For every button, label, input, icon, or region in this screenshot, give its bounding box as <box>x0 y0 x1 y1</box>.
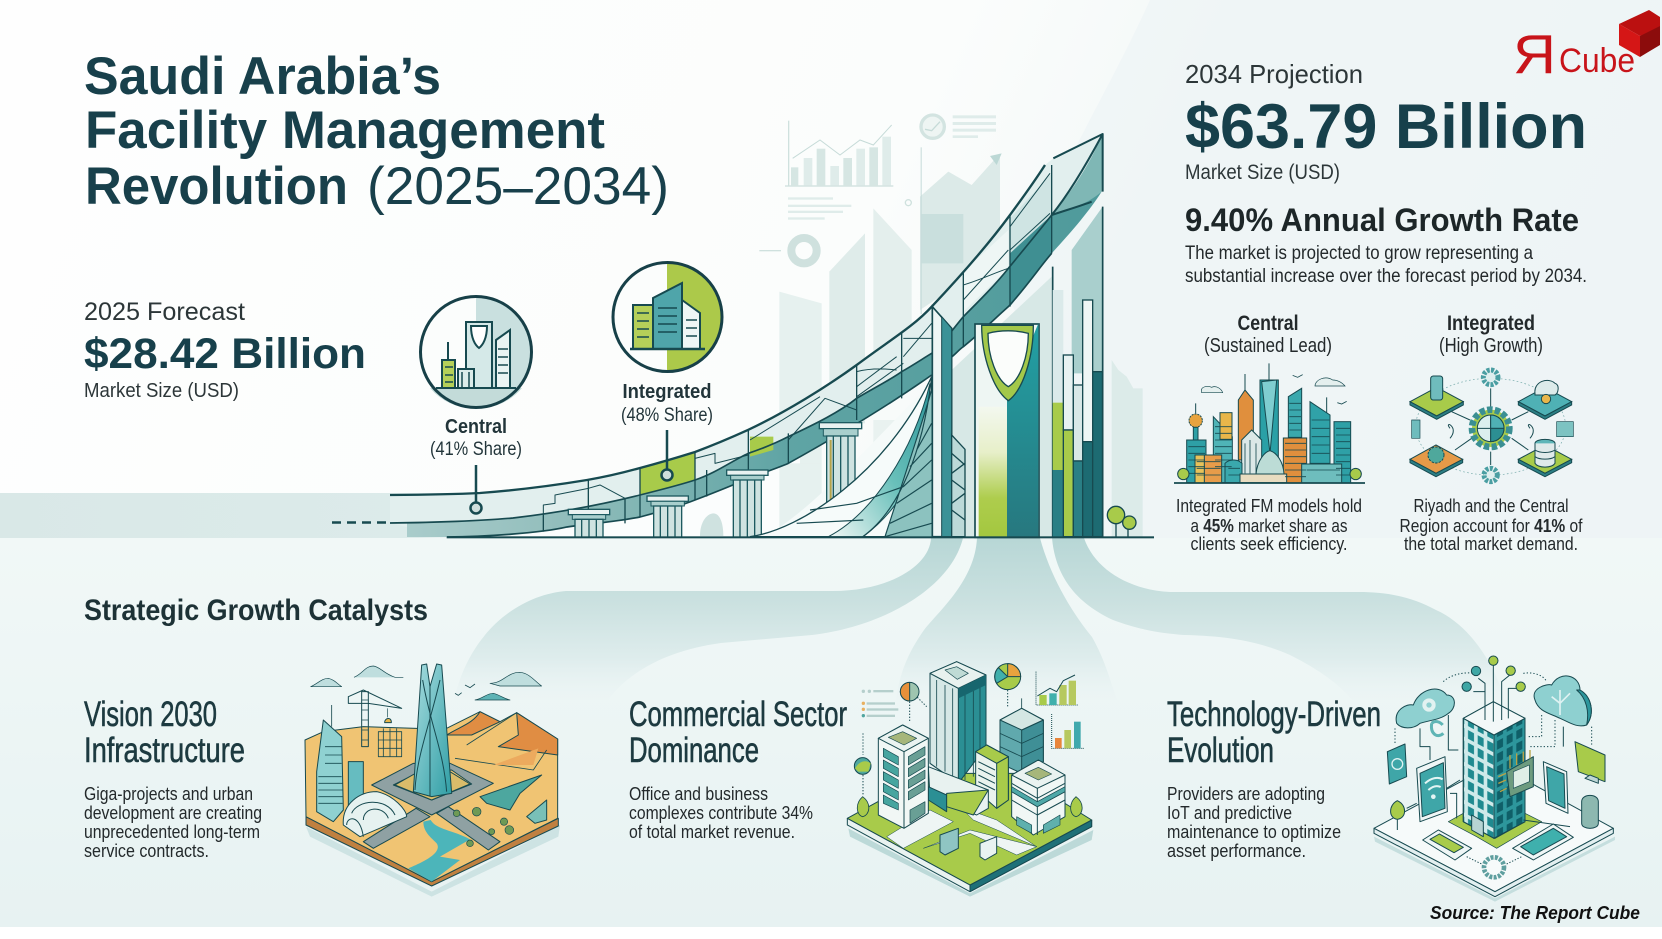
mini charts <box>1036 672 1078 705</box>
building <box>1463 702 1525 838</box>
icon: isometric office district <box>847 662 1093 897</box>
marker: Central share: Central <box>445 416 507 438</box>
shrubs <box>453 807 514 847</box>
title: Saudi Arabia’s <box>84 47 441 106</box>
logo: RCube: Cube <box>1559 42 1635 80</box>
pie badges <box>995 664 1021 690</box>
main skyline growth curve illustration <box>390 113 1154 538</box>
2034 projection stat: Market Size (USD) <box>1185 161 1340 184</box>
marker: Integrated share: Integrated <box>622 381 712 403</box>
left tower <box>878 725 928 828</box>
2025 forecast stat: 2025 Forecast <box>84 298 245 326</box>
chip <box>1507 757 1533 797</box>
2025 forecast stat: $28.42 Billion <box>84 330 366 378</box>
title: Revolution <box>85 157 348 216</box>
logo: RCube <box>1513 10 1660 85</box>
panel: Central sustained lead: clients seek efficiency. <box>1190 533 1348 554</box>
panel: Integrated high growth <box>1400 312 1583 554</box>
catalyst: Commercial Sector Dominance <box>629 662 1093 897</box>
panel: Central sustained lead: (Sustained Lead) <box>1204 334 1332 357</box>
catalyst: Technology-Driven Evolution: Technology-Driven <box>1167 695 1381 734</box>
catalyst: Vision 2030 Infrastructure: development are creating <box>84 803 262 823</box>
heading: Strategic Growth Catalysts: Strategic Growth Catalysts <box>84 594 428 627</box>
growth rate block: The market is projected to grow representing a <box>1185 242 1533 264</box>
catalyst: Technology-Driven Evolution: maintenance to optimize <box>1167 822 1341 842</box>
catalyst: Commercial Sector Dominance: complexes contribute 34% <box>629 803 813 823</box>
curved band fills <box>390 134 1103 537</box>
small trees <box>1107 506 1136 537</box>
pillars <box>568 470 768 653</box>
panel: Central sustained lead: Central <box>1238 312 1298 335</box>
panel: Central sustained lead: Integrated FM models hold <box>1176 495 1362 516</box>
tablets and devices <box>1417 757 1447 822</box>
catalyst: Technology-Driven Evolution: Providers are adopting <box>1167 784 1325 804</box>
green block <box>976 745 1008 808</box>
2034 projection stat: $63.79 Billion <box>1185 92 1587 162</box>
title: (2025–2034) <box>367 157 669 216</box>
connector <box>475 465 477 503</box>
marker: Integrated share <box>613 262 722 480</box>
wing net <box>750 377 932 537</box>
antenna lines <box>1473 665 1520 722</box>
plaza pieces <box>940 828 958 855</box>
Kingdom Centre tower <box>975 323 1039 537</box>
2025 forecast stat <box>84 298 366 402</box>
connector block <box>928 767 988 815</box>
main tower <box>413 664 452 797</box>
logo: RCube: Я <box>1513 23 1556 85</box>
clouds <box>311 678 342 687</box>
panel: Integrated high growth: Integrated <box>1447 312 1535 335</box>
catalyst: Commercial Sector Dominance: Office and business <box>629 784 768 804</box>
connections <box>1395 673 1592 747</box>
ground line <box>447 536 1154 538</box>
panel: Central sustained lead <box>1174 312 1365 554</box>
2034 projection stat <box>1185 59 1587 184</box>
catalyst: Vision 2030 Infrastructure <box>84 664 560 897</box>
catalyst: Vision 2030 Infrastructure: Giga-projects and urban <box>84 784 253 804</box>
catalyst: Technology-Driven Evolution: asset performance. <box>1167 841 1306 861</box>
panel: Integrated high growth: Region account for 41% of <box>1400 515 1583 536</box>
catalyst: Vision 2030 Infrastructure: Infrastructure <box>84 731 245 770</box>
marker: Central share: (41% Share) <box>430 438 522 460</box>
panel: Integrated high growth: the total market demand. <box>1404 533 1578 554</box>
back right tower <box>1000 708 1043 773</box>
catalyst: Commercial Sector Dominance: Dominance <box>629 731 759 770</box>
catalyst: Technology-Driven Evolution: Evolution <box>1167 731 1274 770</box>
right bars <box>1053 207 1103 537</box>
source note: Source: The Report Cube <box>1430 902 1640 923</box>
growth rate block: 9.40% Annual Growth Rate <box>1185 202 1579 238</box>
flow ribbons from the skyline to the catalysts <box>454 538 1505 700</box>
central column <box>932 307 952 537</box>
trees <box>857 797 1082 817</box>
icon: red cube <box>1619 10 1660 57</box>
green pane at the Integrated marker <box>640 452 695 495</box>
catalyst: Commercial Sector Dominance: Commercial Sector <box>629 695 847 734</box>
panel: Integrated high growth: (High Growth) <box>1439 334 1543 357</box>
2034 projection stat: 2034 Projection <box>1185 59 1363 89</box>
catalyst: Technology-Driven Evolution: IoT and predictive <box>1167 803 1292 823</box>
dashed lead-in <box>332 521 388 524</box>
stadium <box>480 775 542 810</box>
pale building behind tower <box>952 277 1052 537</box>
front right building <box>1012 760 1065 835</box>
dome <box>343 792 407 837</box>
panel: Central sustained lead: a 45% market share as <box>1190 515 1348 536</box>
growth rate block <box>1185 202 1587 287</box>
icon: colourful city skyline <box>1174 363 1365 483</box>
faint list <box>862 690 898 717</box>
icon: isometric desert city <box>305 664 560 897</box>
icon: smart building with cloud and devices <box>1374 656 1615 902</box>
tall tower <box>930 662 986 783</box>
catalyst: Commercial Sector Dominance: of total market revenue. <box>629 822 795 842</box>
left towers <box>317 720 343 822</box>
pane tints <box>1052 134 1103 215</box>
marker: Integrated share: (48% Share) <box>621 404 713 426</box>
growth rate block: substantial increase over the forecast period by 2034. <box>1185 265 1587 287</box>
connector <box>666 430 668 469</box>
structural lines <box>390 134 1103 537</box>
icon: connected service network <box>1410 370 1573 482</box>
faint background charts and skyline <box>759 115 1143 537</box>
clouds <box>1396 689 1454 728</box>
marker: Central share <box>420 296 532 514</box>
roads <box>372 763 493 815</box>
crane <box>348 690 402 747</box>
water <box>408 820 470 882</box>
title: Facility Management <box>85 101 605 160</box>
2025 forecast stat: Market Size (USD) <box>84 379 239 402</box>
catalyst: Vision 2030 Infrastructure: Vision 2030 <box>84 695 217 734</box>
white space beneath curve <box>513 457 800 537</box>
catalyst: Vision 2030 Infrastructure: service contracts. <box>84 841 209 861</box>
catalyst: Technology-Driven Evolution <box>1167 656 1615 902</box>
title <box>84 47 669 216</box>
panel: Integrated high growth: Riyadh and the Central <box>1414 495 1568 516</box>
catalyst: Vision 2030 Infrastructure: unprecedented long-term <box>84 822 260 842</box>
